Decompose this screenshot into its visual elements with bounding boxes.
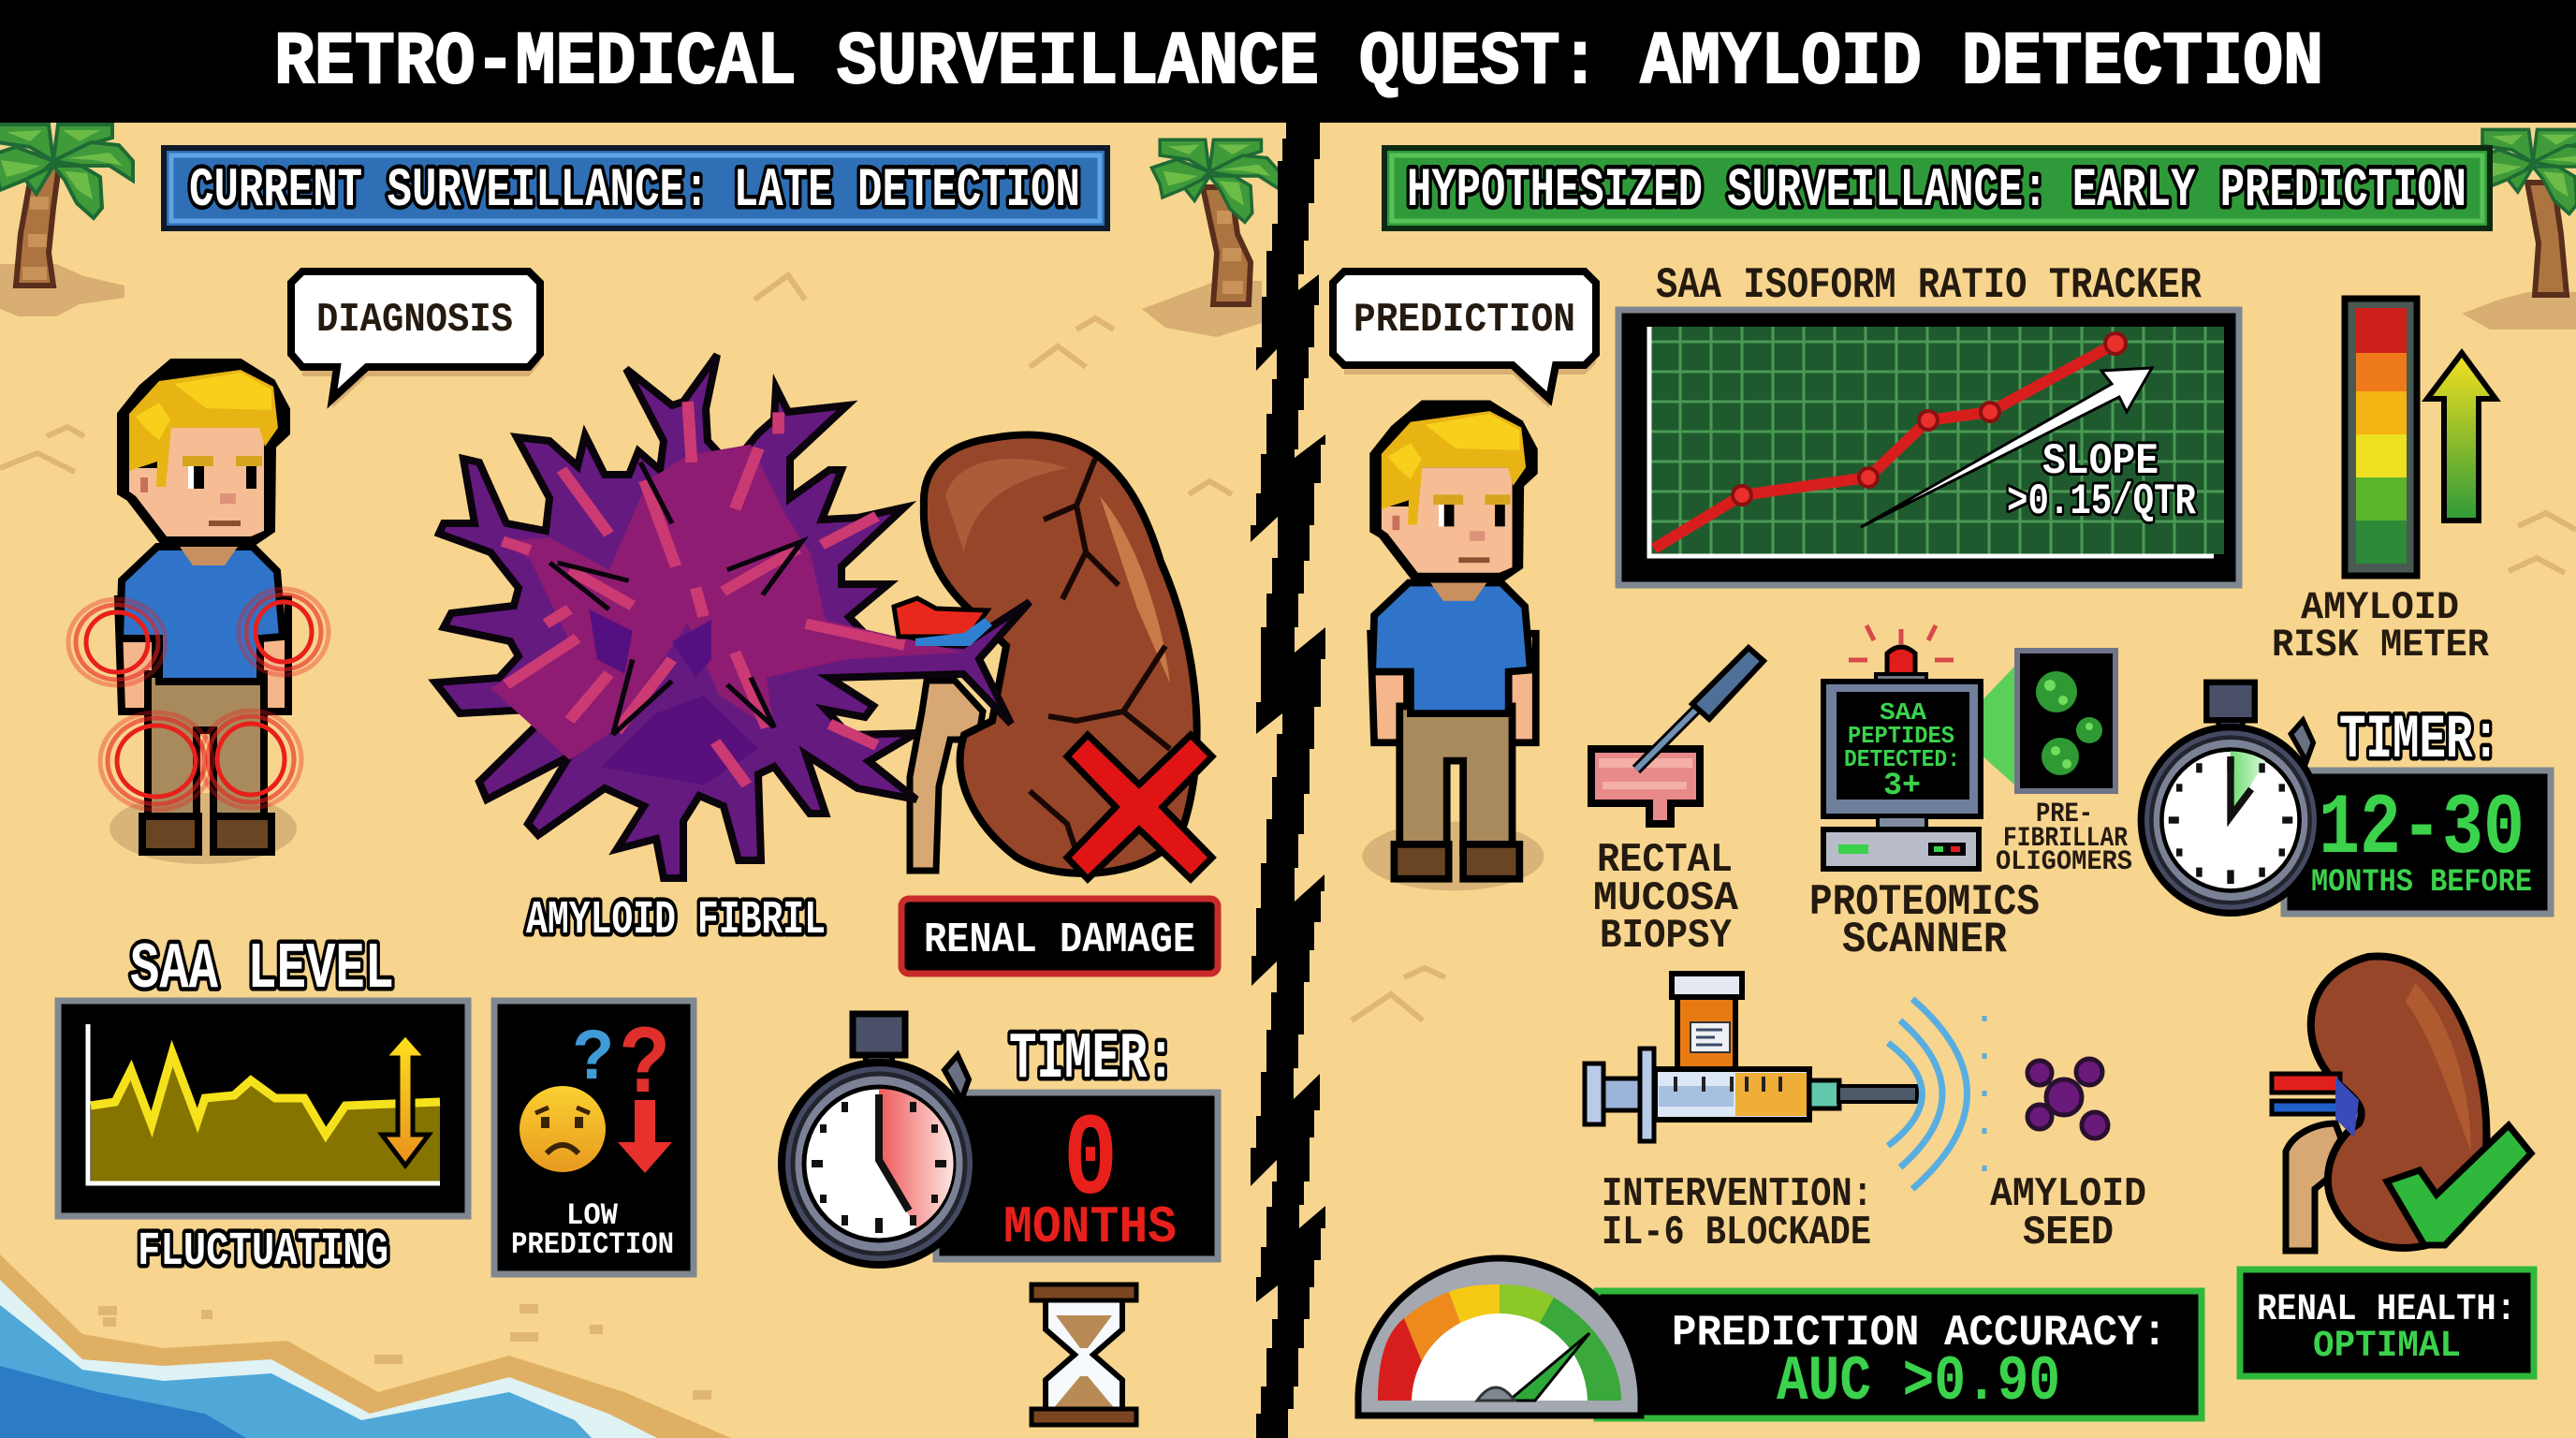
chart: SAA isoform ratio tracker: SLOPE [2042,437,2159,486]
label: rectal mucosa biopsy: MUCOSA [1593,875,1739,922]
label: proteomics scanner: SCANNER [1842,916,2007,964]
timer panel: 12-30 months [2284,770,2551,914]
lightning divider [1251,122,1325,1438]
sand speckles [0,275,2576,1395]
label: timer left: TIMER: [1009,1023,1175,1097]
label: timer right: TIMER: [2339,705,2499,775]
chart: SAA isoform ratio tracker: >0.15/QTR [2007,477,2196,526]
label: renal damage: RENAL DAMAGE [924,917,1195,964]
label: renal health: RENAL HEALTH: [2257,1289,2516,1331]
panel: prediction accuracy: AUC >0.90 [1777,1346,2060,1418]
speech bubble: prediction: PREDICTION [1354,297,1575,344]
timer panel: 0 months: MONTHS [1003,1197,1177,1257]
palm tree: centre left [1142,139,1280,337]
panel: low prediction: PREDICTION [511,1227,674,1262]
oligomer panel [2017,651,2115,791]
palm tree: top right [2462,129,2576,330]
arrow: rising risk [2427,353,2496,521]
icon: stopwatch early [2141,682,2320,913]
proteomics scanner: DETECTED: [1844,745,1960,773]
panel: low prediction: ? [573,1019,614,1101]
risk meter [2345,299,2417,576]
label: pre-fibrillar oligomers: OLIGOMERS [1996,846,2132,878]
label: amyloid seed [1990,1171,2146,1256]
heading: tracker: SAA ISOFORM RATIO TRACKER [1656,261,2202,310]
panel: low prediction: ? [620,1011,670,1122]
chart: SAA isoform ratio tracker [1618,310,2239,585]
character: patient early stage [1362,402,1544,890]
palm tree: top left [0,125,133,316]
label: rectal mucosa biopsy: BIOPSY [1600,913,1733,960]
panel: prediction accuracy [1597,1291,2202,1418]
icon: medication bottle [1672,974,1742,1069]
red X mark [1067,735,1212,879]
timer panel: 12-30 months: MONTHS BEFORE [2311,865,2532,901]
label: proteomics scanner [1809,878,2040,964]
label: rectal mucosa biopsy [1593,837,1739,960]
blue shock waves [1888,999,1984,1198]
panel: prediction accuracy: PREDICTION ACCURACY: [1672,1309,2167,1357]
label: renal damage [901,899,1218,974]
amyloid fibril [435,355,1030,878]
icon: rectal biopsy [1591,648,1764,824]
beam to oligomers [1954,666,2015,785]
timer panel: 12-30 months: 12-30 [2319,780,2525,878]
label: proteomics scanner: PROTEOMICS [1809,878,2040,927]
label: pre-fibrillar oligomers: PRE- [2036,799,2093,830]
speech bubble: diagnosis: DIAGNOSIS [316,297,513,344]
healthy kidney [2272,956,2486,1251]
proteomics scanner: SAA [1880,698,1926,726]
label: intervention [1602,1171,1873,1256]
title bar [0,0,2576,123]
shoreline water [0,1255,731,1438]
speech bubble: diagnosis [291,271,540,408]
banner: current surveillance: CURRENT SURVEILLANCE: LATE DETECTION [189,161,1080,222]
proteomics scanner: PEPTIDES [1848,722,1954,750]
icon: hourglass [1032,1284,1136,1425]
panel: low prediction: LOW [566,1198,619,1233]
label: amyloid seed: AMYLOID [1990,1171,2146,1218]
green check mark [2387,1125,2531,1245]
label: amyloid risk meter: AMYLOID [2301,585,2459,630]
label: intervention: INTERVENTION: [1602,1171,1873,1218]
accuracy gauge [1358,1258,1641,1416]
joint pain rings [68,589,329,810]
character: patient with joint pain [68,360,329,864]
heading: SAA level: SAA LEVEL [130,933,394,1007]
label: renal health: OPTIMAL [2313,1326,2461,1368]
proteomics scanner: 3+ [1883,769,1921,804]
label: amyloid risk meter [2272,585,2490,668]
label: pre-fibrillar oligomers: FIBRILLAR [2003,823,2128,855]
panel: low prediction [494,1001,694,1274]
icon: worried face [520,1086,606,1172]
label: renal health [2240,1269,2534,1376]
label: amyloid risk meter: RISK METER [2272,623,2490,668]
damaged kidney [910,434,1197,873]
label: amyloid fibril: AMYLOID FIBRIL [526,894,826,947]
proteomics scanner [1823,625,2015,869]
amyloid seeds [2027,1059,2108,1138]
label: intervention: IL-6 BLOCKADE [1602,1210,1871,1256]
timer panel: 0 months [936,1093,1218,1259]
timer panel: 0 months: 0 [1063,1097,1118,1228]
chart: fluctuating SAA level [58,1001,468,1216]
banner: hypothesized surveillance [1384,148,2490,228]
icon: syringe [1585,1049,1917,1141]
label: amyloid seed: SEED [2023,1210,2114,1256]
title bar: RETRO-MEDICAL SURVEILLANCE QUEST: AMYLOID DETECTION [274,21,2323,106]
icon: stopwatch late [782,1014,976,1265]
speech bubble: prediction [1333,271,1596,408]
renal vessels [894,598,992,646]
label: rectal mucosa biopsy: RECTAL [1597,837,1733,884]
banner: current surveillance [164,148,1107,228]
label: pre-fibrillar oligomers [1996,799,2132,878]
label: fluctuating: FLUCTUATING [138,1225,388,1279]
